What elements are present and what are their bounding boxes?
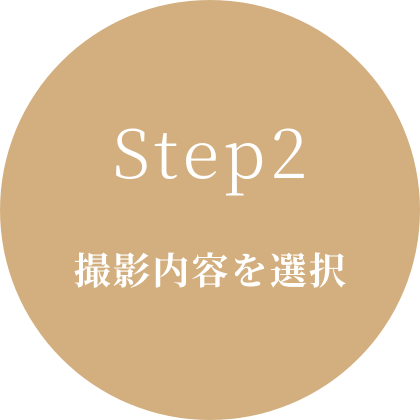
subheading: 撮影内容を選択: 撮影内容を選択 [74, 241, 348, 295]
heading: Step2: Step2 [112, 102, 312, 198]
